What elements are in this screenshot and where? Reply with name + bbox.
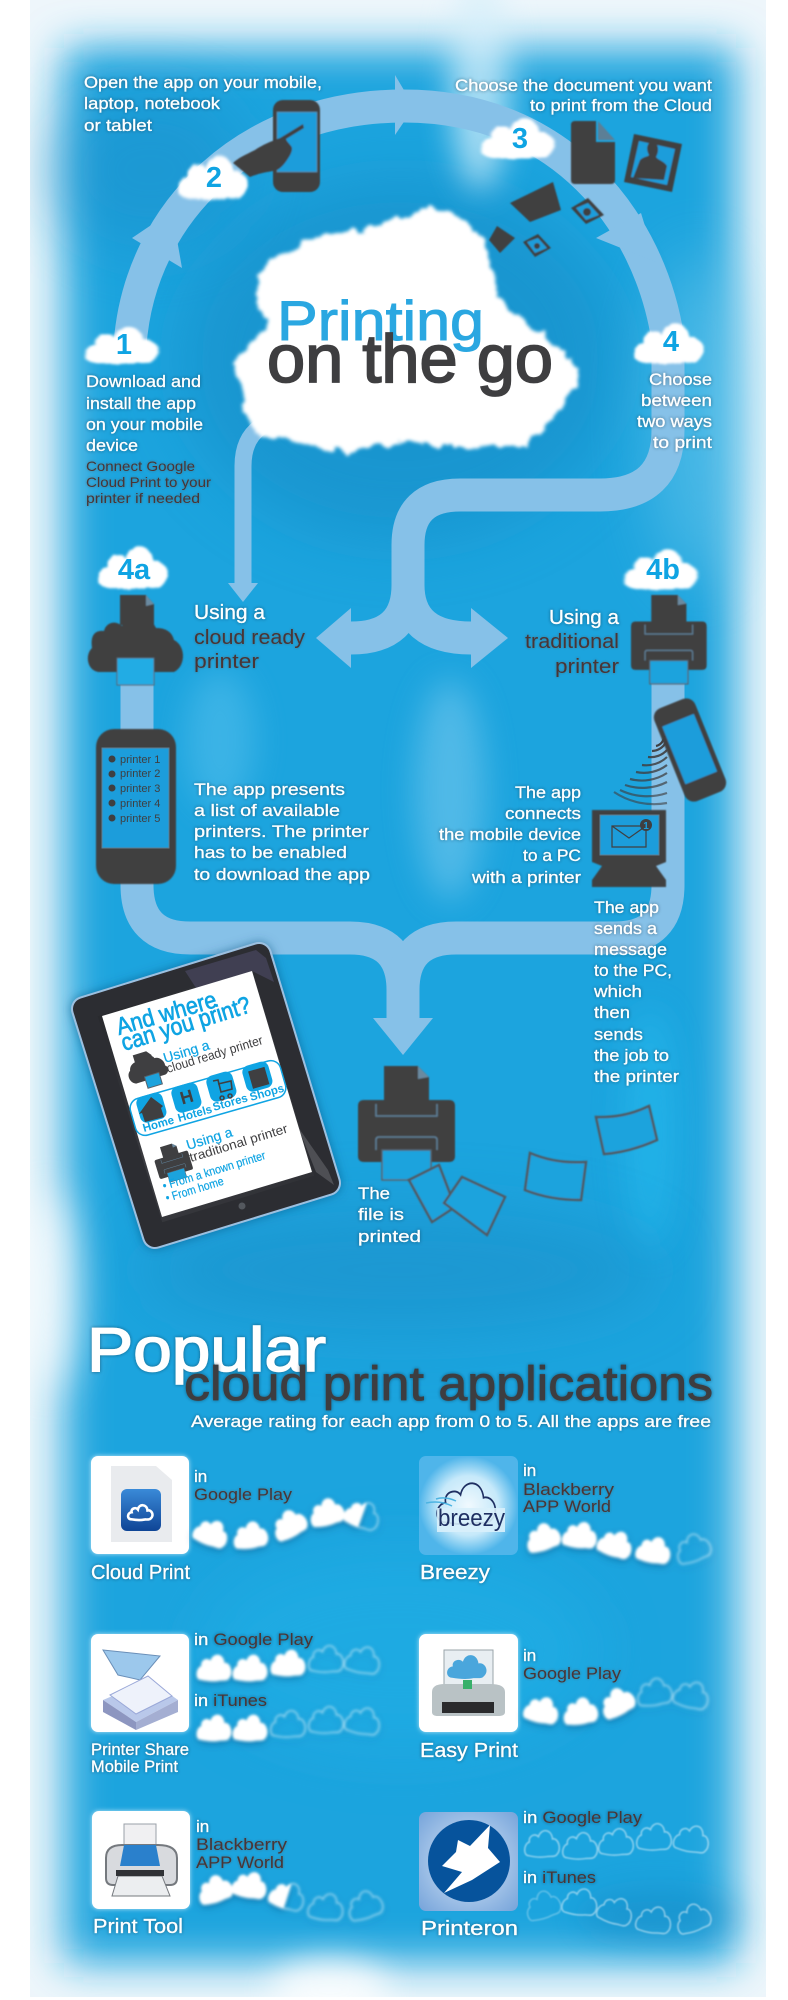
step 3: choose the document: Choose the document you want <box>455 76 712 95</box>
step 4b: traditional printer: Using a <box>549 607 620 629</box>
step 4b: traditional printer: message <box>594 940 667 959</box>
tablet: and where can you print: Using a <box>161 1037 211 1066</box>
step 4: choose between two ways: two ways <box>637 412 712 431</box>
step 1: cloud and text: device <box>86 436 138 455</box>
rating: 3 clouds <box>522 1677 712 1727</box>
section heading: popular cloud print applications: Popular <box>87 1316 326 1385</box>
app: Easy Print <box>419 1634 712 1762</box>
step 4b: traditional printer: printer <box>555 656 619 678</box>
step 4: choose between two ways: Choose <box>649 370 712 389</box>
icon: phone with hand <box>233 100 320 192</box>
step 4b: traditional printer: The app <box>594 898 659 917</box>
mini cloud printer icon <box>123 1047 172 1093</box>
place icons: Shops <box>249 1083 286 1104</box>
app: Easy Print: in <box>523 1646 536 1665</box>
rating: 4 clouds <box>522 1519 714 1566</box>
place icons <box>135 1060 286 1135</box>
traditional printer in tablet: Using a <box>184 1124 234 1153</box>
title text: Printing <box>277 289 484 352</box>
tablet: and where can you print: And where <box>113 986 220 1041</box>
step 1: cloud and text: printer if needed <box>86 490 200 506</box>
section heading: popular cloud print applications: Average rating for each app from 0 to 5. All the apps are free <box>191 1412 711 1431</box>
app: Printer Share: Mobile Print <box>91 1757 178 1776</box>
app: Easy Print: Google Play <box>523 1664 622 1683</box>
step 4: choose between two ways: to print <box>653 433 712 452</box>
place icons: Hotels <box>177 1104 214 1125</box>
flow arrows: cycle and branches <box>130 75 668 1055</box>
app: Printeron: in iTunes <box>523 1868 596 1887</box>
tablet: and where can you print: cloud ready printer <box>164 1032 265 1076</box>
icon: phone listing printers: printer 2 <box>120 768 160 780</box>
step 4b: traditional printer: connects <box>505 804 581 823</box>
icon: phone listing printers: printer 4 <box>120 798 160 810</box>
app: Breezy: Blackberry <box>523 1480 615 1499</box>
final printer and printed pages: file is <box>358 1205 404 1224</box>
step 3: choose the document: to print from the Cloud <box>530 96 712 115</box>
step 2: open the app: laptop, notebook <box>84 94 221 113</box>
step 4a: cloud ready printer: printers. The printer <box>194 822 369 841</box>
rating: 4.5 clouds <box>191 1495 383 1551</box>
place icons: H <box>178 1086 196 1108</box>
rating: 0 clouds <box>522 1887 714 1936</box>
app: Easy Print: Easy Print <box>420 1740 518 1762</box>
rating: 0 clouds <box>525 1823 711 1859</box>
final printer and printed pages: The <box>358 1184 390 1203</box>
final printer and printed pages: printed <box>358 1227 421 1246</box>
step 4a: cloud ready printer <box>88 546 370 884</box>
step 1: cloud and text: Cloud Print to your <box>86 474 211 490</box>
section heading: popular cloud print applications: cloud print applications <box>184 1358 713 1411</box>
step 1: cloud and text <box>85 327 211 506</box>
icon: tilted phone <box>651 695 729 805</box>
step 3: choose the document: 3 <box>512 123 528 155</box>
step 4b: traditional printer: The app <box>515 783 581 802</box>
icon: phone listing printers: printer 1 <box>120 754 160 766</box>
step 1: cloud and text: install the app <box>86 394 196 413</box>
section heading: popular cloud print applications <box>87 1316 713 1431</box>
step 4a: cloud ready printer: 4a <box>118 554 151 586</box>
icon: phone listing printers: printer 3 <box>120 783 160 795</box>
step 4a: cloud ready printer: printer <box>194 651 259 673</box>
rating: 3 clouds <box>197 1644 382 1681</box>
app: Print Tool: Blackberry <box>196 1835 288 1854</box>
traditional printer in tablet: • From home <box>164 1174 226 1205</box>
icon: PC with message: 1 <box>643 821 649 832</box>
step 2: open the app: 2 <box>206 162 222 194</box>
final printer and printed pages <box>358 1066 657 1246</box>
app: Cloud Print <box>91 1456 383 1584</box>
app: Breezy <box>419 1456 714 1584</box>
app: Printeron: in Google Play <box>523 1808 643 1827</box>
where list box <box>128 1058 288 1138</box>
app: Printeron <box>419 1808 714 1940</box>
step 1: cloud and text: on your mobile <box>86 415 203 434</box>
app: Print Tool: APP World <box>196 1853 284 1872</box>
icon: printer <box>631 595 707 684</box>
rating: 2.5 clouds <box>194 1869 385 1923</box>
app: Cloud Print: Google Play <box>194 1485 293 1504</box>
step 4b: traditional printer: with a printer <box>471 868 581 887</box>
step 4a: cloud ready printer: a list of available <box>194 801 340 820</box>
app: Printer Share <box>91 1630 382 1776</box>
step 4b: traditional printer: the mobile device <box>439 825 581 844</box>
step 4b: traditional printer: traditional <box>525 631 619 653</box>
step 4b: traditional printer: then <box>594 1003 630 1022</box>
traditional printer in tablet <box>151 1120 290 1205</box>
place icons: Stores <box>212 1092 249 1114</box>
app: Printer Share: Printer Share <box>91 1740 189 1759</box>
step 4b: traditional printer: the printer <box>594 1067 679 1086</box>
step 1: cloud and text: 1 <box>116 329 132 361</box>
icon: document and photo <box>489 121 682 257</box>
step 4b: traditional printer: 4b <box>646 554 680 586</box>
main title cloud <box>234 207 581 452</box>
app: Breezy: Breezy <box>420 1562 490 1584</box>
app: Printeron: Printeron <box>421 1918 518 1940</box>
step 4: choose between two ways: between <box>641 391 712 410</box>
app: Cloud Print: in <box>194 1467 207 1486</box>
app: Cloud Print: Cloud Print <box>91 1562 190 1584</box>
rating: 2 clouds <box>197 1705 382 1741</box>
step 4b: traditional printer: which <box>593 982 642 1001</box>
icon: phone listing printers <box>96 729 176 884</box>
tablet: and where can you print <box>84 950 334 1236</box>
app: Printer Share: in iTunes <box>194 1691 267 1710</box>
tablet: and where can you print: can you print? <box>118 992 254 1057</box>
app: Print Tool: Print Tool <box>93 1916 183 1938</box>
icon: phone listing printers: printer 5 <box>120 813 160 825</box>
traditional printer in tablet: • From a known printer <box>161 1148 267 1193</box>
step 4b: traditional printer: to a PC <box>523 846 581 865</box>
place icons: Home <box>142 1115 176 1135</box>
app: Printer Share: in Google Play <box>194 1630 314 1649</box>
step 2: open the app: Open the app on your mobile, <box>84 73 322 92</box>
traditional printer in tablet: traditional printer <box>187 1120 290 1165</box>
step 4a: cloud ready printer: Using a <box>194 602 266 624</box>
app: Print Tool: in <box>196 1817 209 1836</box>
app: Breezy: in <box>523 1461 536 1480</box>
step 4b: traditional printer: to the PC, <box>594 961 672 980</box>
step 4b: traditional printer: the job to <box>594 1046 669 1065</box>
step 4: choose between two ways: 4 <box>663 326 679 358</box>
step 4a: cloud ready printer: The app presents <box>194 780 345 799</box>
step 4b: traditional printer <box>439 549 729 1086</box>
step 4a: cloud ready printer: cloud ready <box>194 627 305 649</box>
step 1: cloud and text: Download and <box>86 372 201 391</box>
app: Breezy: APP World <box>523 1497 611 1516</box>
title text: on the go <box>267 321 553 397</box>
icon: wireless signal <box>614 736 667 804</box>
step 3: choose the document <box>455 76 712 257</box>
step 2: open the app: or tablet <box>84 116 152 135</box>
step 1: cloud and text: Connect Google <box>86 458 195 474</box>
title text <box>267 289 553 397</box>
step 4b: traditional printer: sends <box>594 1025 643 1044</box>
step 4b: traditional printer: sends a <box>594 919 658 938</box>
app: Breezy: breezy <box>438 1505 505 1532</box>
icon: PC with message <box>592 810 666 887</box>
step 2: open the app <box>84 73 322 200</box>
step 4a: cloud ready printer: has to be enabled <box>194 843 347 862</box>
step 4a: cloud ready printer: to download the app <box>194 865 370 884</box>
step 4: choose between two ways <box>634 323 712 452</box>
icon: cloud printer <box>88 595 183 685</box>
app: Print Tool <box>92 1811 385 1938</box>
